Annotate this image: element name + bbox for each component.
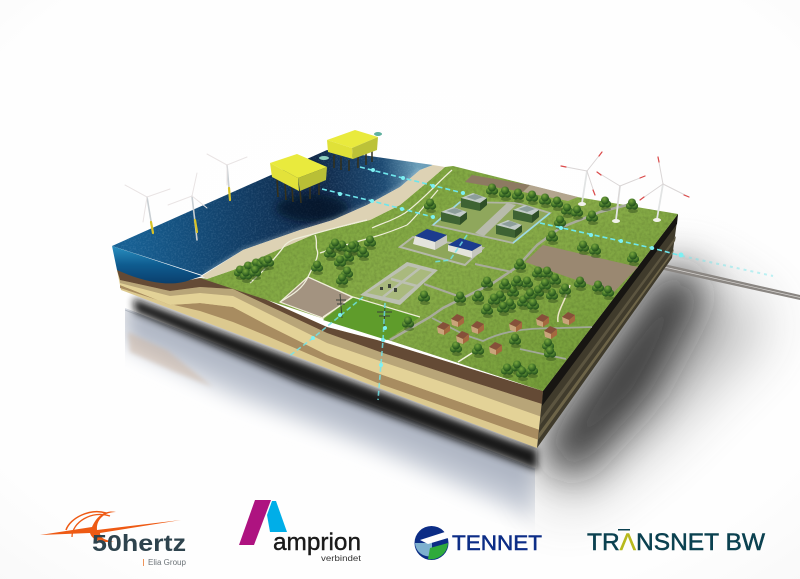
logo: amprion: verbindet bbox=[321, 554, 362, 563]
hall 4 bbox=[496, 220, 522, 238]
roads bbox=[250, 170, 627, 362]
bright meadow bbox=[323, 297, 420, 340]
transmission cable bbox=[664, 264, 800, 300]
beach bbox=[202, 165, 445, 279]
back field 2 bbox=[523, 185, 578, 201]
field: east bbox=[525, 245, 638, 293]
contact shadow bbox=[133, 298, 537, 470]
logo: TenneT: TENNET bbox=[452, 532, 542, 555]
hall 2 bbox=[441, 207, 467, 225]
offshore wind turbine 2 bbox=[168, 173, 207, 240]
substation bbox=[360, 262, 438, 305]
water ripples bbox=[112, 150, 433, 280]
grass texture bbox=[200, 166, 678, 391]
surf line bbox=[205, 170, 420, 274]
block cross-section: right face bbox=[537, 214, 678, 448]
converter station pad bbox=[400, 229, 483, 265]
onshore wind turbine 2 bbox=[597, 172, 645, 223]
green halls pad bbox=[433, 193, 550, 243]
building: west converter hall bbox=[413, 229, 447, 250]
logo: 50hertz: Elia Group bbox=[148, 558, 187, 567]
platform reflection bbox=[276, 194, 348, 222]
trees bbox=[234, 184, 639, 381]
platform: front bbox=[270, 154, 329, 203]
layer: taupe bbox=[120, 280, 542, 417]
sea front face bbox=[112, 246, 202, 283]
hall 1 bbox=[461, 193, 487, 211]
building: east converter hall bbox=[448, 238, 482, 258]
land surface bbox=[200, 165, 678, 391]
onshore wind turbine 1 bbox=[561, 152, 602, 206]
field: west bbox=[280, 277, 352, 318]
layer: pale sand bbox=[120, 283, 542, 430]
logo: amprion: amprion bbox=[273, 529, 361, 556]
platform: rear bbox=[327, 130, 382, 171]
offshore wind turbine 3 bbox=[207, 154, 247, 200]
logo: 50hertz bbox=[40, 511, 187, 567]
logo: TenneT bbox=[414, 526, 542, 560]
layer: dark sand bbox=[120, 285, 540, 440]
sea surface bbox=[112, 150, 433, 280]
layer: topsoil bbox=[117, 270, 543, 404]
logo: amprion bbox=[239, 500, 362, 563]
block cross-section: front face bbox=[117, 270, 543, 448]
wide block shadow right bbox=[540, 262, 770, 510]
onshore wind turbine 3 bbox=[640, 157, 689, 222]
hall 3 bbox=[513, 205, 539, 223]
warm reflection patch bbox=[128, 332, 213, 387]
block reflection bbox=[125, 300, 535, 520]
infographic canvas bbox=[40, 130, 800, 566]
cyan cable routes bbox=[288, 167, 773, 400]
houses bbox=[437, 312, 575, 355]
logo: 50hertz: 50hertz bbox=[92, 530, 186, 556]
logo: TransnetBW: TRΛNSNET BW bbox=[587, 529, 765, 556]
offshore wind turbine 1 bbox=[125, 185, 170, 233]
block shadow right bbox=[540, 262, 705, 475]
pylons bbox=[336, 294, 392, 328]
back field 1 bbox=[465, 175, 530, 192]
